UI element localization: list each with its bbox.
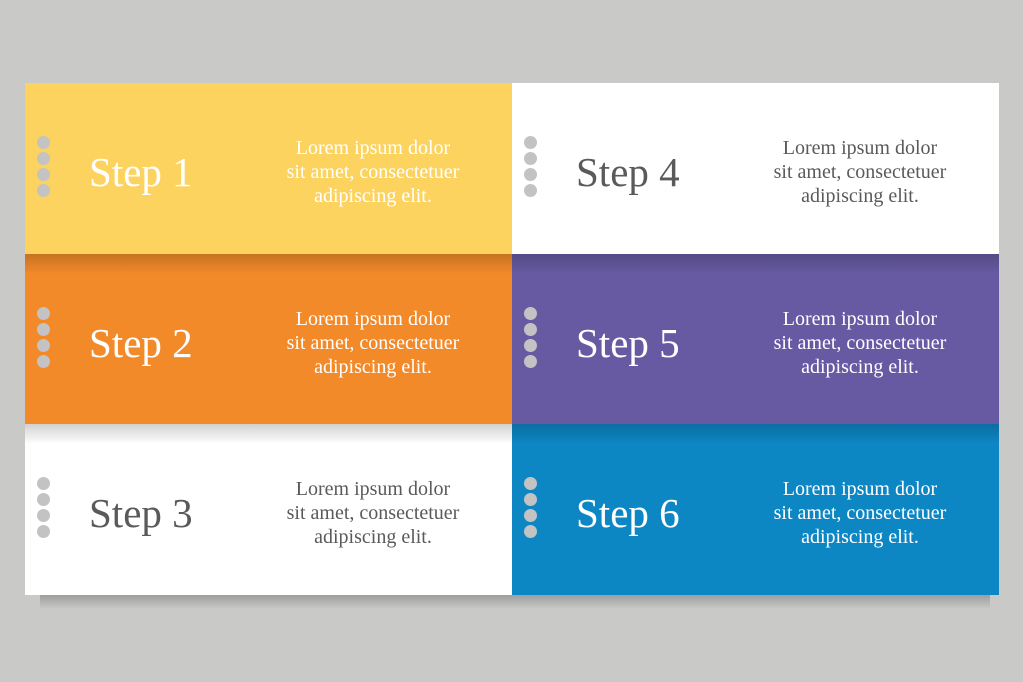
text 5: sit amet, consectetuer bbox=[774, 332, 946, 354]
text 3: adipiscing elit. bbox=[314, 526, 432, 548]
text 5 bbox=[774, 308, 946, 378]
dots 5 bbox=[524, 307, 537, 368]
text 6: Lorem ipsum dolor bbox=[783, 478, 937, 500]
text 3: Lorem ipsum dolor bbox=[296, 478, 450, 500]
text 3: sit amet, consectetuer bbox=[287, 502, 459, 524]
dots 2 bbox=[37, 307, 50, 368]
text 5: Lorem ipsum dolor bbox=[783, 308, 937, 330]
panel: step 4 bbox=[512, 83, 999, 254]
text 6 bbox=[774, 478, 946, 548]
dots 3 bbox=[37, 477, 50, 538]
text 4: sit amet, consectetuer bbox=[774, 161, 946, 183]
heading step 2: Step 2 bbox=[89, 320, 193, 366]
panel: step 1 bbox=[25, 83, 512, 254]
dots 1 bbox=[37, 136, 50, 197]
heading step 5: Step 5 bbox=[576, 320, 680, 366]
heading step 1: Step 1 bbox=[89, 149, 193, 195]
panel: step 5 bbox=[512, 254, 999, 425]
text 2: adipiscing elit. bbox=[314, 356, 432, 378]
dots 6 bbox=[524, 477, 537, 538]
dots 4 bbox=[524, 136, 537, 197]
panel: step 3 bbox=[25, 424, 512, 595]
text 2: Lorem ipsum dolor bbox=[296, 308, 450, 330]
text 2 bbox=[287, 308, 460, 378]
heading step 6: Step 6 bbox=[576, 490, 680, 536]
heading step 3: Step 3 bbox=[89, 490, 193, 536]
panel: step 6 bbox=[512, 424, 999, 595]
text 1 bbox=[287, 137, 460, 207]
text 1: sit amet, consectetuer bbox=[287, 161, 459, 183]
bottom shadow bbox=[40, 595, 990, 609]
text 2: sit amet, consectetuer bbox=[287, 332, 459, 354]
heading step 4: Step 4 bbox=[576, 149, 680, 195]
text 4: Lorem ipsum dolor bbox=[783, 137, 937, 159]
text 6: adipiscing elit. bbox=[801, 526, 919, 548]
text 5: adipiscing elit. bbox=[801, 356, 919, 378]
text 4: adipiscing elit. bbox=[801, 185, 919, 207]
text 3 bbox=[287, 478, 460, 548]
panel: step 2 bbox=[25, 254, 512, 425]
text 4 bbox=[774, 137, 946, 207]
text 1: Lorem ipsum dolor bbox=[296, 137, 450, 159]
text 6: sit amet, consectetuer bbox=[774, 502, 946, 524]
text 1: adipiscing elit. bbox=[314, 185, 432, 207]
